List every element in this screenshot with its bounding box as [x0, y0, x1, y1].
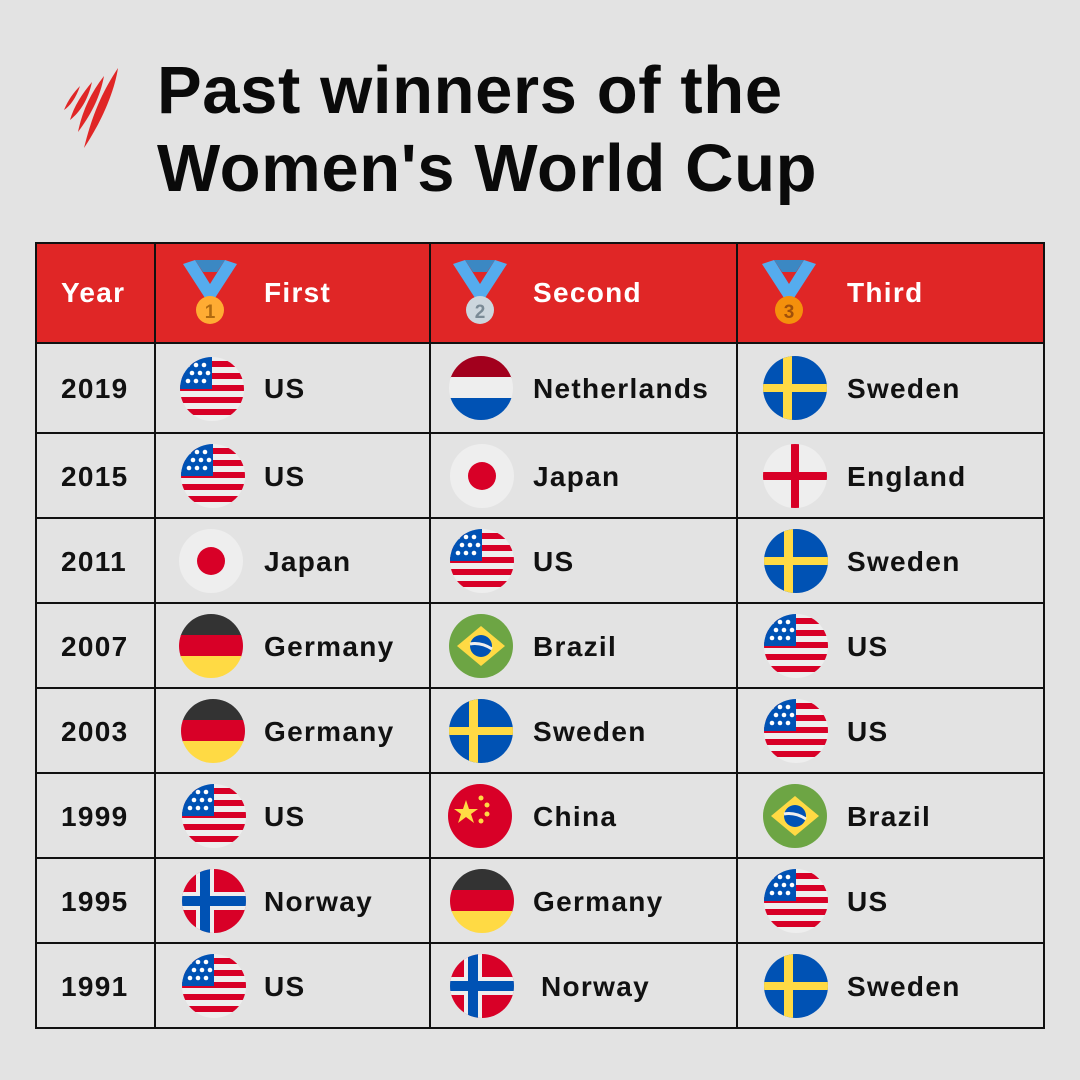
row 2015: England: [847, 461, 967, 492]
row 1991: Norway: [541, 971, 650, 1002]
icon: gold medal: 1: [205, 302, 216, 323]
row 2003: US: [847, 716, 888, 747]
row 2015: Japan: [533, 461, 620, 492]
header: first: First: [264, 277, 331, 308]
row 2015: US: [264, 461, 306, 492]
logo: [64, 68, 118, 148]
row 2003: Sweden: [533, 716, 647, 747]
row 2011: [61, 529, 961, 593]
header: second: Second: [533, 277, 642, 308]
row 1995: Germany: [533, 886, 664, 917]
row 1995: [61, 869, 888, 933]
row 2019: 2019: [61, 373, 128, 404]
title: Past winners of the: [157, 53, 783, 128]
row 2011: 2011: [61, 546, 127, 577]
row 2015: 2015: [61, 461, 128, 492]
icon: bronze medal: [762, 260, 816, 324]
row 1995: Norway: [264, 886, 373, 917]
row 2015: [61, 444, 967, 508]
row 2003: Germany: [264, 716, 394, 747]
row 2007: Germany: [264, 631, 394, 662]
icon: silver medal: [453, 260, 507, 324]
row 2019: US: [264, 373, 306, 404]
row 1995: US: [847, 886, 888, 917]
row 2007: US: [847, 631, 888, 662]
row 1991: 1991: [61, 971, 128, 1002]
row 2003: 2003: [61, 716, 128, 747]
row 1999: [61, 784, 931, 848]
row 1991: [61, 954, 961, 1018]
row 2007: [61, 614, 888, 678]
header: third: Third: [847, 277, 924, 308]
row 1991: Sweden: [847, 971, 961, 1002]
icon: silver medal: 2: [475, 302, 485, 323]
title: [157, 53, 817, 206]
row 1999: China: [533, 801, 617, 832]
icon: bronze medal: 3: [784, 302, 794, 323]
table: [35, 242, 1045, 1029]
header row: [35, 242, 1045, 343]
row 2007: 2007: [61, 631, 128, 662]
row 2007: Brazil: [533, 631, 617, 662]
row 2019: Sweden: [847, 373, 961, 404]
header: year: Year: [61, 277, 125, 308]
row 1999: Brazil: [847, 801, 931, 832]
row 2011: Sweden: [847, 546, 961, 577]
title: Women's World Cup: [157, 131, 817, 206]
row 1995: 1995: [61, 886, 128, 917]
row 2011: Japan: [264, 546, 351, 577]
row 2003: [61, 699, 888, 763]
row 1991: US: [264, 971, 306, 1002]
row 2011: US: [533, 546, 574, 577]
icon: gold medal: [183, 260, 237, 324]
row 2019: [61, 356, 961, 421]
row 1999: 1999: [61, 801, 128, 832]
row 2019: Netherlands: [533, 373, 709, 404]
row 1999: US: [264, 801, 306, 832]
